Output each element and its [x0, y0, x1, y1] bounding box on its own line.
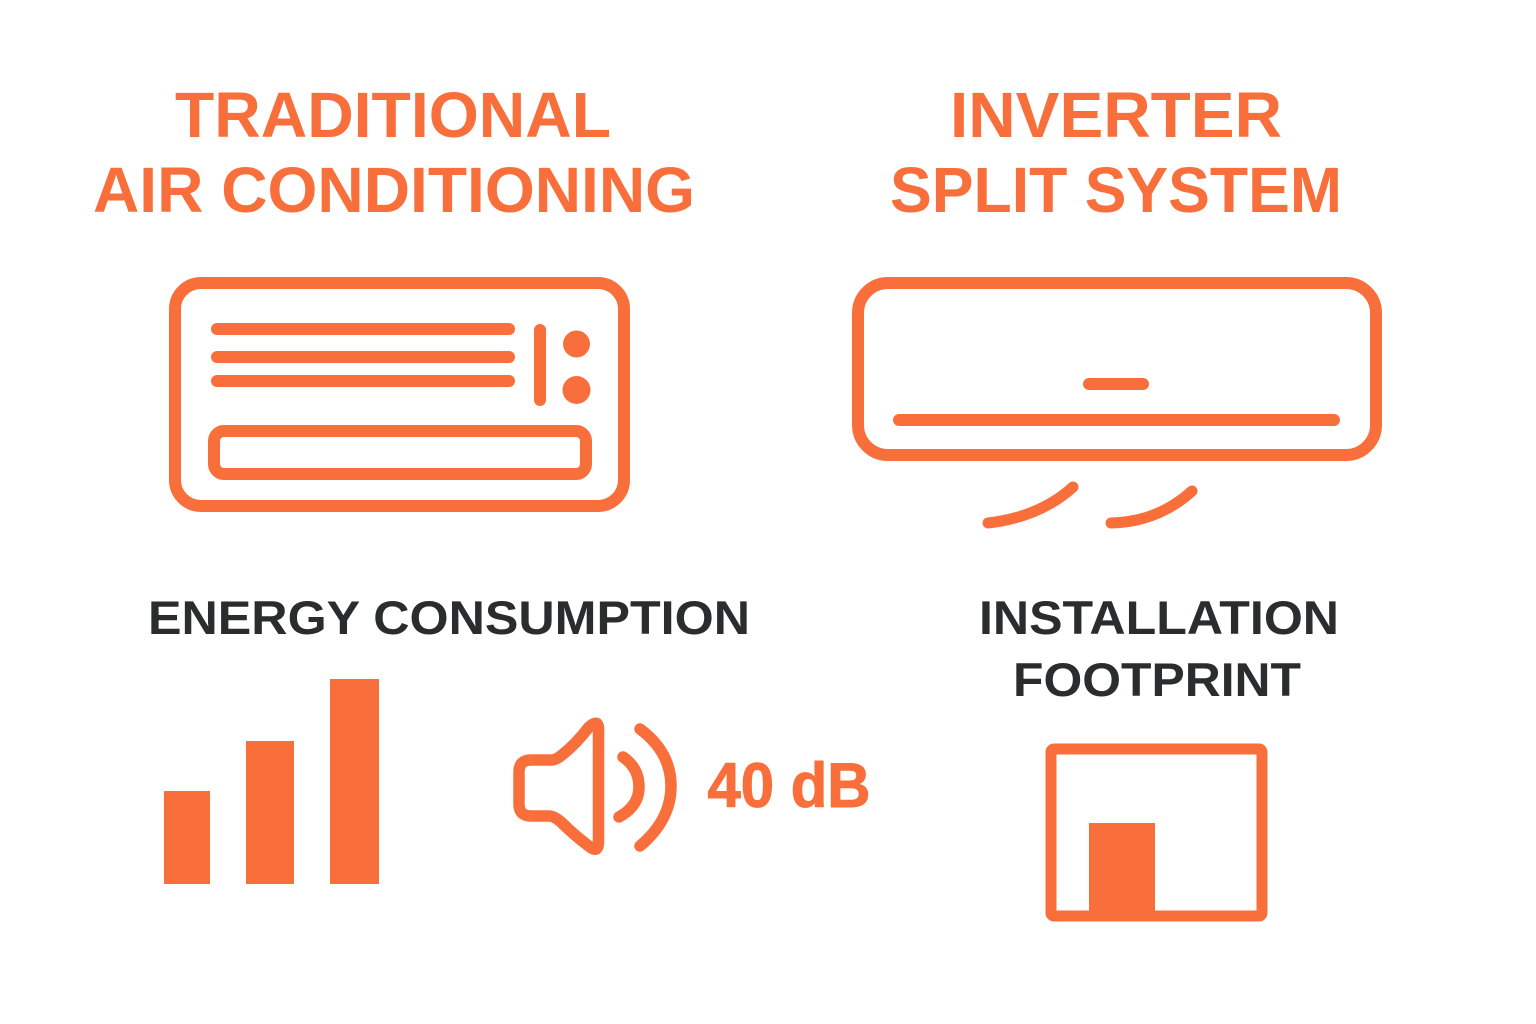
heading: installation footprint: [979, 591, 1339, 706]
heading: energy consumption: ENERGY CONSUMPTION: [148, 591, 750, 644]
icon: installation footprint: [1051, 749, 1262, 916]
icon: traditional window air conditioner: [175, 283, 624, 506]
title: traditional air conditioning: TRADITIONAL: [175, 79, 611, 151]
title: traditional air conditioning: AIR CONDITIONING: [93, 154, 695, 226]
title: traditional air conditioning: [93, 79, 695, 226]
noise level label: 40 dB: [708, 751, 870, 821]
title: inverter split system: [890, 79, 1342, 226]
bar chart: energy consumption: [164, 679, 379, 884]
heading: installation footprint: INSTALLATION: [979, 591, 1339, 644]
icon: inverter split unit: [858, 283, 1376, 523]
heading: installation footprint: FOOTPRINT: [1013, 653, 1301, 706]
icon: speaker with sound waves: [519, 723, 671, 849]
title: inverter split system: INVERTER: [950, 79, 1282, 151]
title: inverter split system: SPLIT SYSTEM: [890, 154, 1342, 226]
